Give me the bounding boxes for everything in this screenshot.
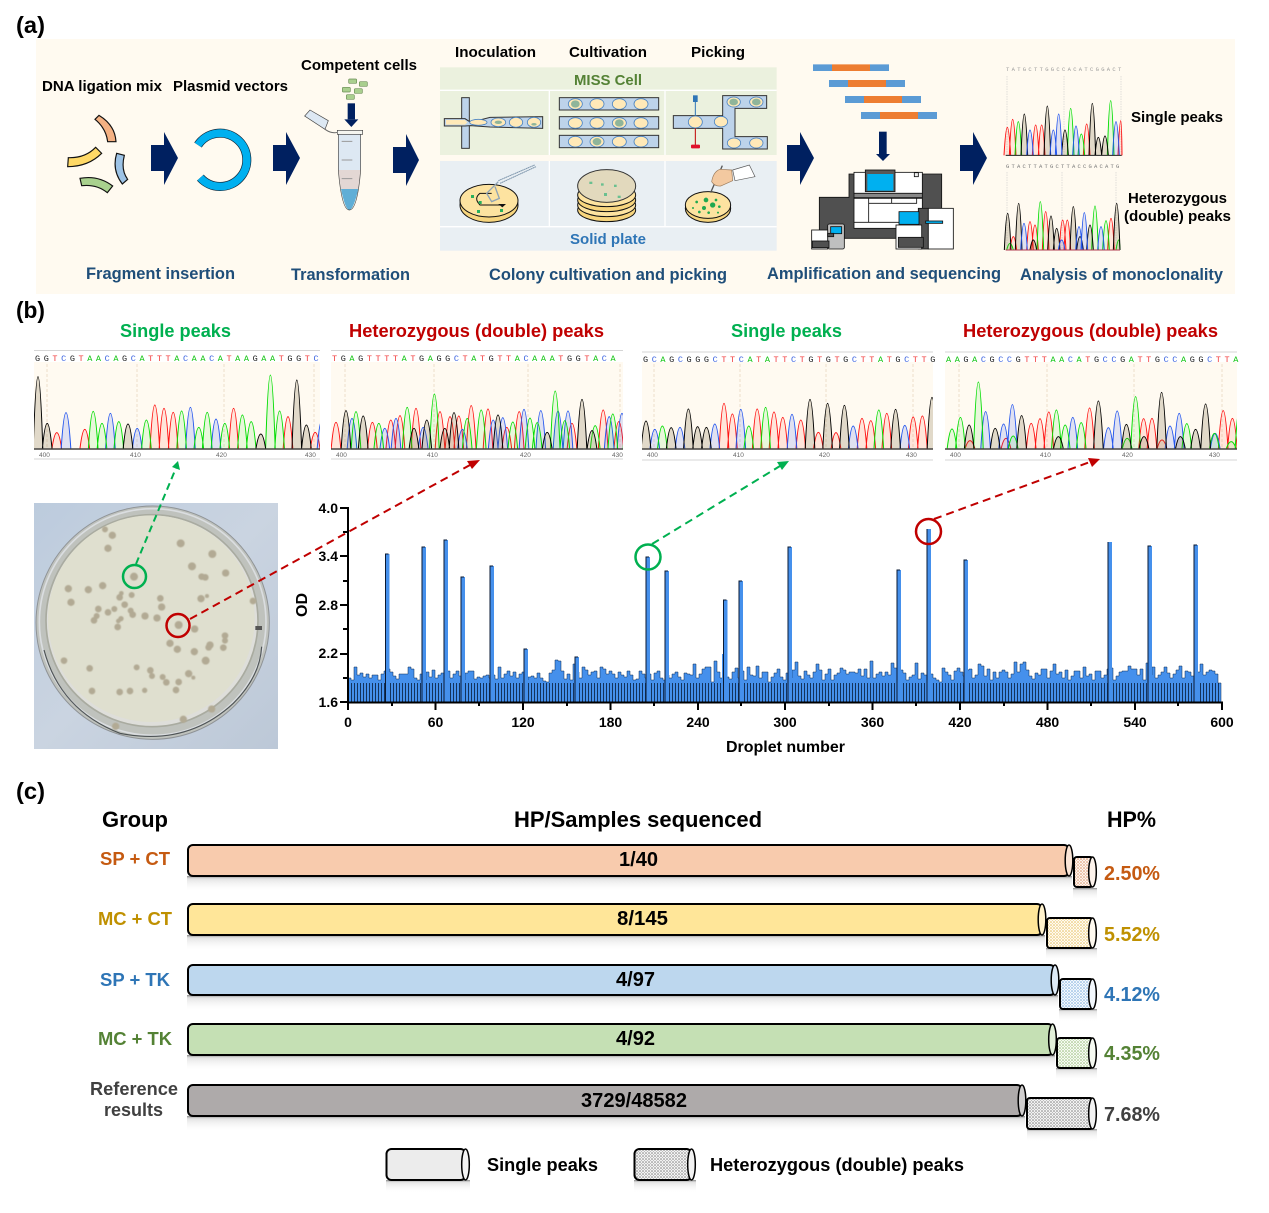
chromatogram 4: double peaks: 410 xyxy=(1040,452,1051,459)
arrow 5 xyxy=(960,132,987,185)
label: Competent cells: Competent cells xyxy=(301,57,417,74)
chromatogram 1: single peaks: 420 xyxy=(216,452,227,459)
chromatogram 1: single peaks: 430 xyxy=(305,452,316,459)
chromatogram 2: double peaks: 420 xyxy=(520,452,531,459)
arrow 3 xyxy=(393,134,419,186)
icon: sequencer xyxy=(812,170,953,249)
chromatogram 2: double peaks: 400 xyxy=(336,452,347,459)
x axis title: Droplet number xyxy=(726,739,845,756)
y axis labels: 4.0 xyxy=(319,500,338,516)
y axis xyxy=(340,507,348,703)
heading: Single peaks 2: Single peaks xyxy=(731,321,842,341)
row: SP + TK: 4/97 xyxy=(616,969,655,991)
icon: amplicon bars xyxy=(813,64,937,119)
row: MC + CT: 8/145 xyxy=(617,908,668,930)
label: Heterozygous (double) peaks: (double) peaks xyxy=(1124,208,1231,225)
chromatogram: small double peaks: GTACTTATGCTTACCGACATG xyxy=(1006,163,1122,170)
x axis labels: 120 xyxy=(511,714,535,730)
workflow background xyxy=(36,39,1235,294)
legend xyxy=(386,1149,964,1193)
chromatogram 4: double peaks xyxy=(945,352,1245,460)
heading: MISS Cell: MISS Cell xyxy=(574,72,642,89)
chromatogram 2: double peaks: 410 xyxy=(427,452,438,459)
row: MC + CT xyxy=(98,904,1160,961)
label: Picking: Picking xyxy=(691,44,745,61)
legend swatch: single peaks xyxy=(386,1149,470,1193)
y axis labels: 3.4 xyxy=(319,548,338,564)
row: Reference results: 7.68% xyxy=(1104,1104,1160,1126)
row: SP + CT: 2.50% xyxy=(1104,863,1160,885)
label: Plasmid vectors: Plasmid vectors xyxy=(173,78,288,95)
icon: DNA fragments xyxy=(68,115,128,193)
panel label (c): (c) xyxy=(16,778,45,804)
chromatogram 3: single peaks: 420 xyxy=(819,452,830,459)
panel label (a): (a) xyxy=(16,12,45,38)
arrow 4 xyxy=(787,132,814,185)
panel label (b): (b) xyxy=(16,297,45,323)
callout: green line bar to single peaks xyxy=(636,461,789,570)
chromatogram 3: single peaks xyxy=(641,352,939,460)
chromatogram 3: single peaks: 410 xyxy=(733,452,744,459)
heading: Heterozygous 1: Heterozygous (double) peaks xyxy=(349,321,604,341)
row: Reference results: 3729/48582 xyxy=(581,1090,687,1112)
x axis labels: 600 xyxy=(1210,714,1234,730)
arrow: amplicons to sequencer xyxy=(876,132,890,161)
chromatogram 1: single peaks xyxy=(33,350,327,459)
row: Reference results: Reference xyxy=(90,1078,178,1099)
row: Reference results: results xyxy=(104,1099,163,1120)
label: Heterozygous (double) peaks xyxy=(1124,190,1231,225)
callout: red line plate to double peaks xyxy=(166,460,480,637)
arrow 2 xyxy=(273,132,300,185)
x axis labels: 480 xyxy=(1036,714,1059,730)
heading: Heterozygous 2: Heterozygous (double) peaks xyxy=(963,321,1218,341)
chromatogram: small double peaks xyxy=(1004,163,1122,250)
column header: Group: Group xyxy=(102,807,168,832)
x axis labels: 60 xyxy=(428,714,443,730)
row: MC + CT: MC + CT xyxy=(98,908,173,929)
row: MC + TK: MC + TK xyxy=(98,1028,173,1049)
x axis xyxy=(347,702,1223,710)
x axis labels: 420 xyxy=(948,714,972,730)
caption: Amplification and sequencing: Amplification and sequencing xyxy=(767,265,1001,283)
bars: baseline droplets xyxy=(348,660,1221,702)
x axis labels: 540 xyxy=(1123,714,1147,730)
row: MC + TK xyxy=(98,1024,1160,1081)
chromatogram 2: double peaks: 430 xyxy=(612,452,623,459)
chromatogram 1: single peaks: 410 xyxy=(130,452,141,459)
chromatogram 4: double peaks: 400 xyxy=(950,452,961,459)
caption: Transformation: Transformation xyxy=(291,266,410,284)
chromatogram 1: single peaks: 400 xyxy=(39,452,50,459)
y axis labels xyxy=(319,500,338,710)
chromatogram 4: double peaks: AAGACGCCGTTTAACATGCCGATTGCCAGGCTTA xyxy=(946,355,1242,365)
label: Single peaks: Single peaks xyxy=(1131,109,1223,126)
bar chart: OD by droplet number xyxy=(294,500,1234,756)
callout: red line bar to double peaks xyxy=(916,458,1100,544)
row: SP + TK xyxy=(100,965,1160,1022)
legend label: single peaks: Single peaks xyxy=(487,1155,598,1175)
chromatogram: small single peaks xyxy=(1004,66,1124,155)
legend label: double peaks: Heterozygous (double) peaks xyxy=(710,1155,964,1175)
panel: workflow xyxy=(36,39,1235,294)
y axis labels: 2.2 xyxy=(319,645,338,661)
column header: HP/Samples sequenced: HP/Samples sequenced xyxy=(514,807,762,832)
icon: plasmid vector xyxy=(198,133,247,186)
panel: Solid plate xyxy=(440,161,777,251)
caption: Fragment insertion: Fragment insertion xyxy=(86,265,235,283)
x axis labels: 240 xyxy=(686,714,710,730)
heading: Solid plate: Solid plate xyxy=(570,231,646,248)
row: Reference results xyxy=(90,1078,1160,1142)
y axis title: OD xyxy=(294,593,311,617)
chromatogram 2: double peaks xyxy=(331,350,633,459)
x axis labels: 0 xyxy=(344,714,352,730)
row: SP + CT: 1/40 xyxy=(619,849,658,871)
icon: competent cells and tube xyxy=(305,79,367,210)
chromatogram 2: double peaks: TGAGTTTTATGAGGCTATGTTACAAATGGTACA xyxy=(332,354,619,364)
arrow 1 xyxy=(151,132,178,185)
legend swatch: double peaks xyxy=(634,1149,696,1193)
photo: agar plate with colonies xyxy=(34,503,278,749)
chromatogram 3: single peaks: 400 xyxy=(647,452,658,459)
caption: Colony cultivation and picking: Colony cultivation and picking xyxy=(489,266,727,284)
row: MC + TK: 4.35% xyxy=(1104,1043,1160,1065)
heading: Single peaks 1: Single peaks xyxy=(120,321,231,341)
caption: Analysis of monoclonality: Analysis of monoclonality xyxy=(1020,266,1224,284)
row: SP + TK: SP + TK xyxy=(100,969,171,990)
x axis labels: 180 xyxy=(599,714,622,730)
chromatogram 3: single peaks: GCAGCGGGCTTCATATTCTGTGTGCTTATGCTTG xyxy=(643,355,939,365)
row: MC + CT: 5.52% xyxy=(1104,924,1160,946)
x axis labels: 360 xyxy=(861,714,884,730)
panel: MISS Cell xyxy=(440,67,777,155)
callout: green line plate to single peaks xyxy=(123,461,180,588)
chromatogram 1: single peaks: GGTCGTAACAGCATTTACAACATAAGAATGGTC xyxy=(35,354,322,364)
row: SP + TK: 4.12% xyxy=(1104,984,1160,1006)
label: DNA ligation mix: DNA ligation mix xyxy=(42,78,163,95)
label: Cultivation: Cultivation xyxy=(569,44,647,61)
x axis labels xyxy=(344,714,1234,730)
chromatogram 4: double peaks: 430 xyxy=(1209,452,1220,459)
bars: tall positive droplets xyxy=(386,529,1198,702)
label: Heterozygous (double) peaks: Heterozygous xyxy=(1128,190,1227,207)
y axis labels: 2.8 xyxy=(319,597,338,613)
row: SP + CT xyxy=(100,845,1160,901)
chromatogram 4: double peaks: 420 xyxy=(1122,452,1133,459)
column header: HP%: HP% xyxy=(1107,807,1156,832)
row: MC + TK: 4/92 xyxy=(616,1028,655,1050)
row: SP + CT: SP + CT xyxy=(100,848,171,869)
chromatogram 3: single peaks: 430 xyxy=(906,452,917,459)
chromatogram: small single peaks: TATGCTTGGCCACATCGGACT xyxy=(1006,66,1124,73)
label: Inoculation: Inoculation xyxy=(455,44,536,61)
y axis labels: 1.6 xyxy=(319,694,338,710)
x axis labels: 300 xyxy=(773,714,797,730)
